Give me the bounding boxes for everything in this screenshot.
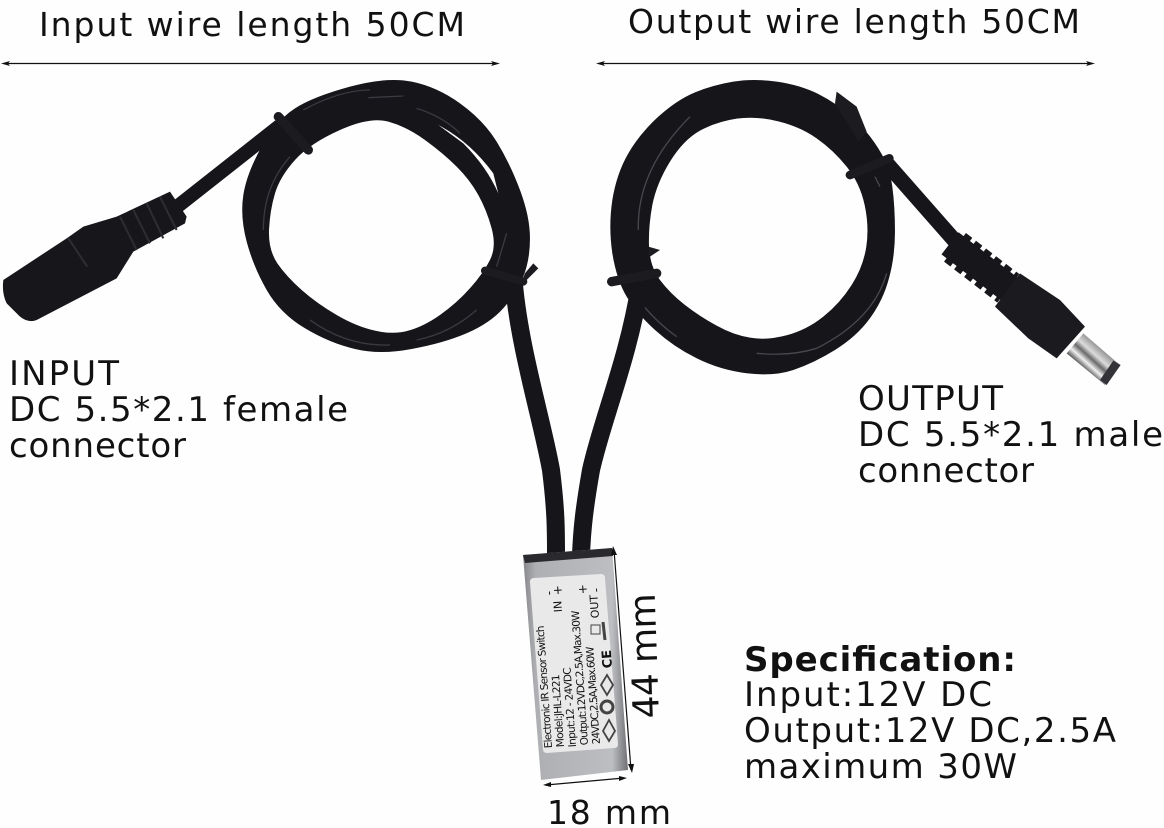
label: 44 mm: 44 mm [623, 593, 668, 719]
module label text: - [542, 590, 556, 596]
connector: DC female plug [3, 192, 187, 321]
connector: metal barrel [1067, 333, 1120, 385]
module label text: Input:12 - 24VDC [562, 667, 579, 748]
input cable coil [242, 80, 538, 352]
text block: specification: maximum 30W [744, 747, 1017, 787]
arrow: 18 mm dimension [543, 776, 627, 787]
text block: output connector: connector [858, 451, 1034, 491]
text block: output connector: DC 5.5*2.1 male [858, 415, 1163, 455]
text block: input connector: INPUT [9, 354, 119, 394]
module label text: - [589, 587, 603, 593]
text block: input connector: DC 5.5*2.1 female [9, 390, 348, 430]
output cable with male connector [950, 243, 1121, 385]
module: IR sensor switch [523, 548, 628, 780]
module label panel [530, 574, 618, 753]
output cable coil [610, 80, 960, 374]
wire: output to module [581, 285, 640, 555]
module label text: + [550, 585, 565, 596]
module body [523, 548, 628, 780]
module label text: Model:JHL-L221 [550, 674, 567, 748]
text block: input connector: connector [9, 426, 186, 466]
text block: output connector: OUTPUT [858, 379, 1003, 419]
arrow: input wire length [1, 61, 500, 66]
module label text: OUT [587, 594, 602, 619]
input cable with female connector [3, 124, 282, 321]
module label text: 24VDC,2.5A,Max.60W [584, 645, 603, 745]
arrow: 44 mm dimension [611, 546, 634, 773]
module label text: IN [551, 600, 565, 613]
strain relief [950, 243, 1012, 291]
text block: specification: Specification: [744, 640, 1016, 680]
heading: output wire length: Output wire length 50CM [628, 2, 1080, 41]
module label text: CE [600, 649, 616, 669]
module end cap [523, 548, 613, 563]
module label text [535, 584, 616, 749]
module label text: Electronic IR Sensor Switch [535, 625, 555, 749]
module label text: Output:12VDC,2.5A,Max.30W [570, 610, 591, 746]
arrow: output wire length [596, 61, 1095, 66]
text block: output connector [858, 379, 1163, 491]
text block: specification: Input:12V DC [744, 675, 992, 715]
heading: input wire length: Input wire length 50CM [39, 5, 465, 44]
module certification marks [591, 622, 615, 741]
module label text: + [575, 584, 590, 595]
connector: DC male plug body [995, 273, 1085, 358]
wire: input to module [514, 285, 556, 555]
text block: specification: Output:12V DC,2.5A [744, 711, 1116, 751]
text block: input connector [9, 354, 348, 466]
text block: specification [744, 640, 1116, 787]
wires into module [514, 285, 640, 555]
wire: input lead [178, 124, 282, 206]
